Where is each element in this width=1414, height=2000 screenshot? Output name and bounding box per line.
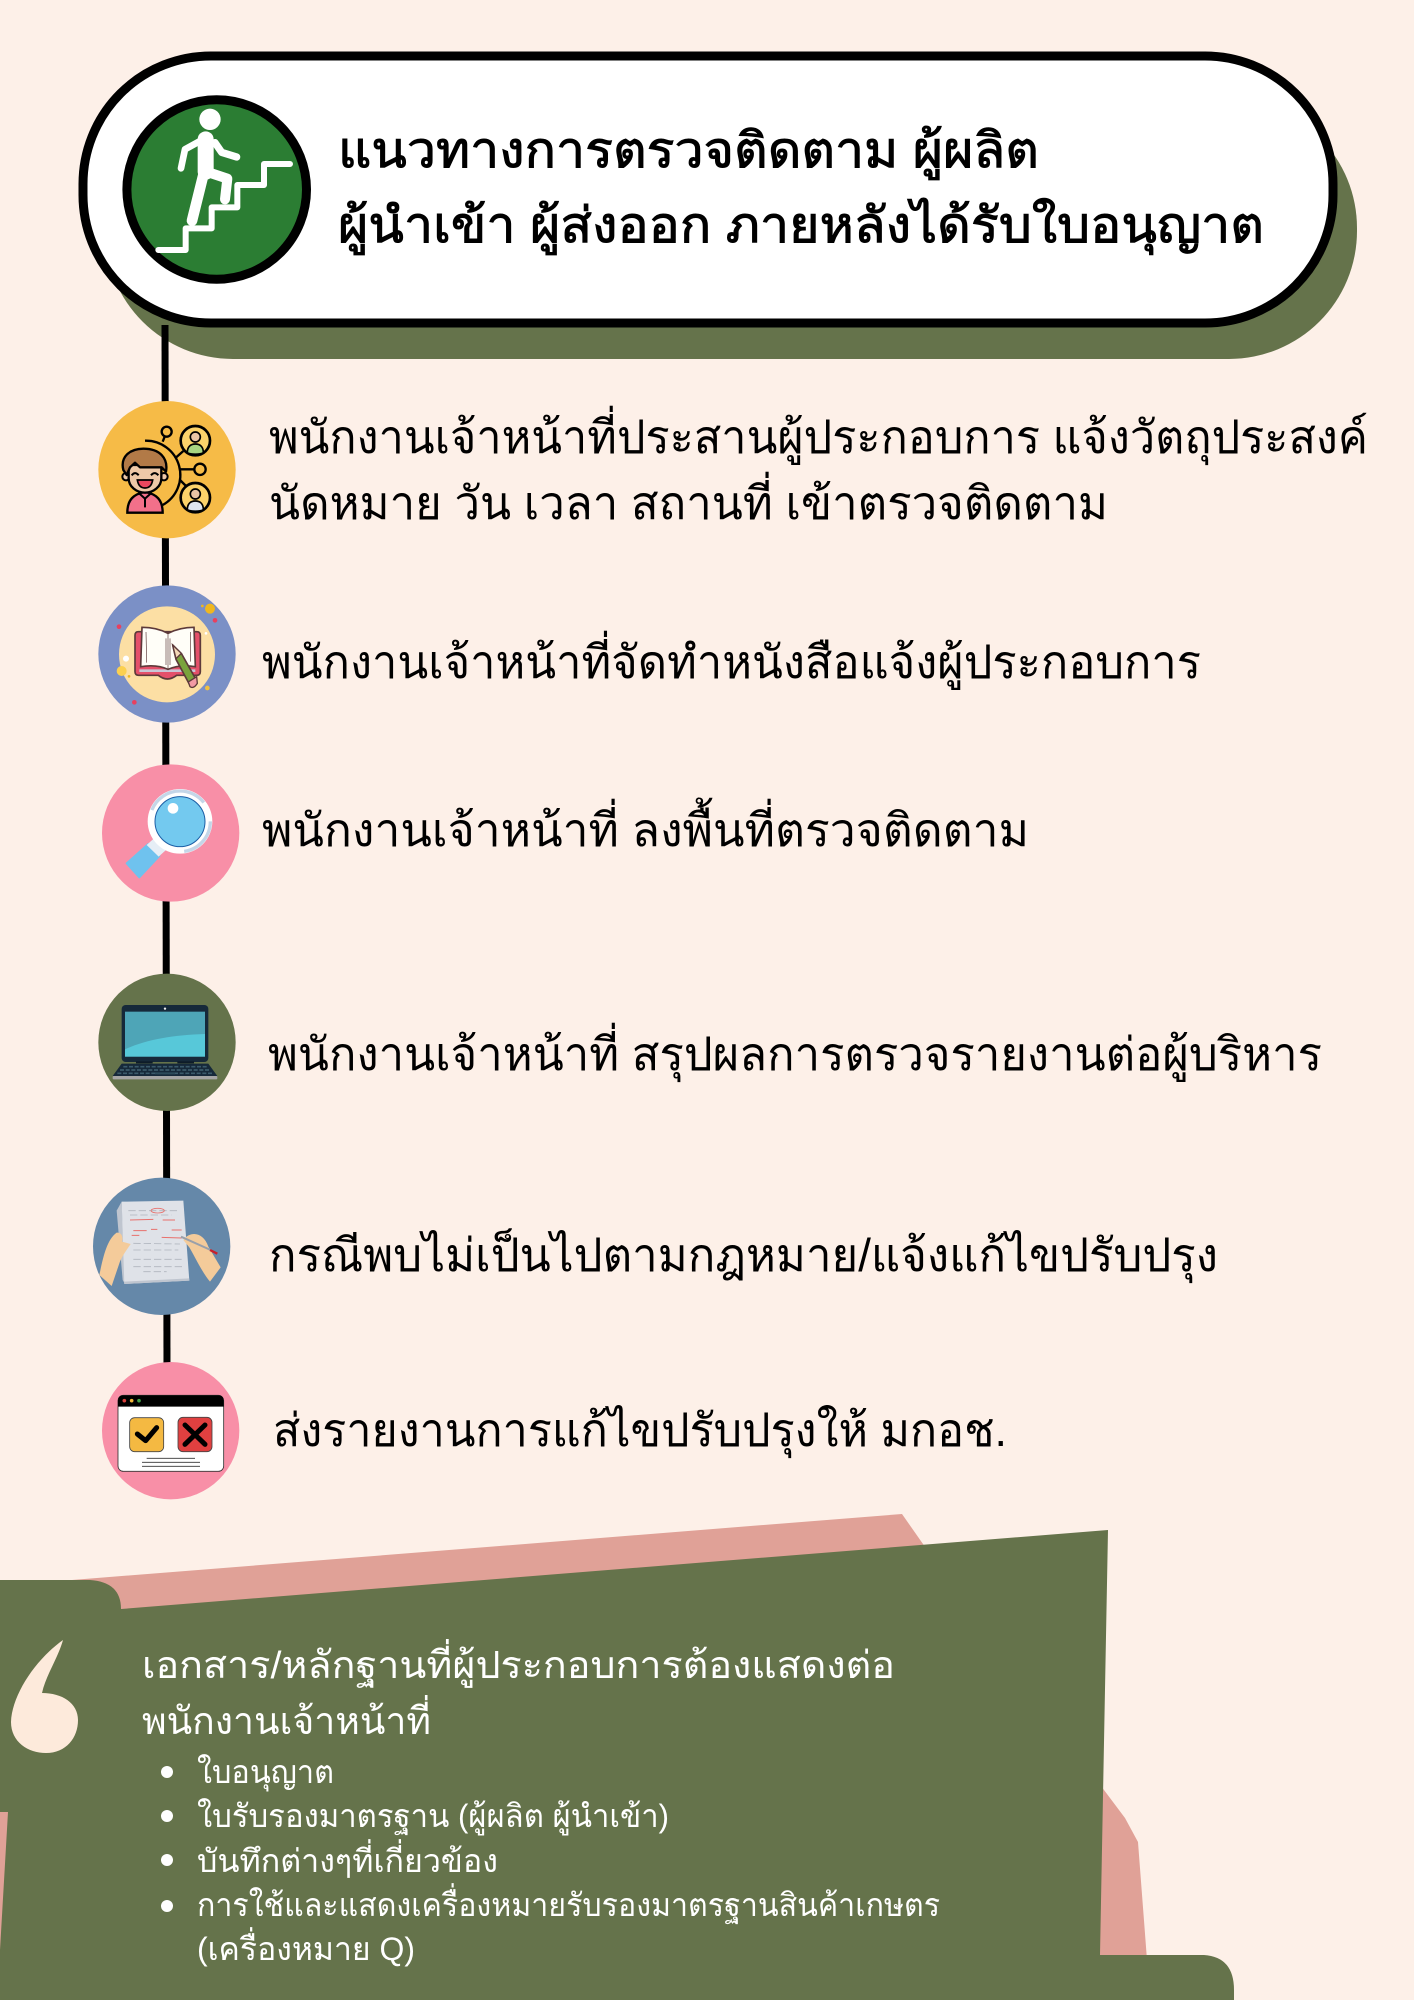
- step 2: [98, 585, 1201, 723]
- bullet list: [161, 1754, 940, 1967]
- bullet list: บันทึกต่างๆที่เกี่ยวข้อง: [197, 1839, 498, 1879]
- timeline connector line: [165, 325, 167, 1370]
- step 4: [98, 974, 1322, 1111]
- step 5: [93, 1178, 1218, 1315]
- icon: person with network: [98, 401, 236, 538]
- green note shape: [0, 1530, 1234, 2000]
- header shadow pill: [105, 100, 1357, 359]
- step 1: [98, 401, 1368, 538]
- step 3 text: พนักงานเจ้าหน้าที่ ลงพื้นที่ตรวจติดตาม: [262, 797, 1029, 856]
- bullet list: ใบอนุญาต: [197, 1754, 334, 1792]
- icon: person climbing stairs: [127, 100, 306, 279]
- bullet list: ใบรับรองมาตรฐาน (ผู้ผลิต ผู้นำเข้า): [197, 1798, 669, 1836]
- panel heading: เอกสาร/หลักฐานที่ผู้ประกอบการต้องแสดงต่อ: [142, 1639, 895, 1688]
- step 6 text: ส่งรายงานการแก้ไขปรับปรุงให้ มกอช.: [273, 1404, 1007, 1459]
- icon: quote mark: [11, 1640, 78, 1753]
- header pill outline: [83, 56, 1333, 323]
- title: ผู้นำเข้า ผู้ส่งออก ภายหลังได้รับใบอนุญาต: [338, 197, 1264, 255]
- header panel: [83, 56, 1333, 323]
- title: [338, 124, 1264, 255]
- step 1 text: พนักงานเจ้าหน้าที่ประสานผู้ประกอบการ แจ้งวัตถุประสงค์: [269, 405, 1368, 466]
- icon: magnifying glass: [102, 764, 239, 902]
- step 5 text: กรณีพบไม่เป็นไปตามกฎหมาย/แจ้งแก้ไขปรับปรุง: [269, 1228, 1218, 1284]
- panel heading: พนักงานเจ้าหน้าที่: [142, 1695, 431, 1743]
- bottom panel: [0, 1514, 1234, 2000]
- step 1 text: [269, 405, 1368, 529]
- step 3: [102, 764, 1029, 902]
- icon: open book with pencil: [98, 585, 236, 723]
- icon: hands correcting paper: [93, 1178, 230, 1315]
- step 4 text: พนักงานเจ้าหน้าที่ สรุปผลการตรวจรายงานต่อผู้บริหาร: [268, 1022, 1322, 1083]
- bullet list: (เครื่องหมาย Q): [197, 1927, 415, 1967]
- icon: laptop: [98, 974, 236, 1111]
- icon: browser window with check and cross: [102, 1362, 239, 1499]
- pink backing shape: [0, 1514, 1147, 2000]
- step 2 text: พนักงานเจ้าหน้าที่จัดทำหนังสือแจ้งผู้ประกอบการ: [262, 630, 1201, 690]
- step 6: [102, 1362, 1007, 1499]
- step 1 text: นัดหมาย วัน เวลา สถานที่ เข้าตรวจติดตาม: [269, 471, 1108, 529]
- panel heading: [142, 1639, 895, 1743]
- title: แนวทางการตรวจติดตาม ผู้ผลิต: [338, 124, 1039, 180]
- bullet list: การใช้และแสดงเครื่องหมายรับรองมาตรฐานสินค้าเกษตร: [197, 1883, 940, 1925]
